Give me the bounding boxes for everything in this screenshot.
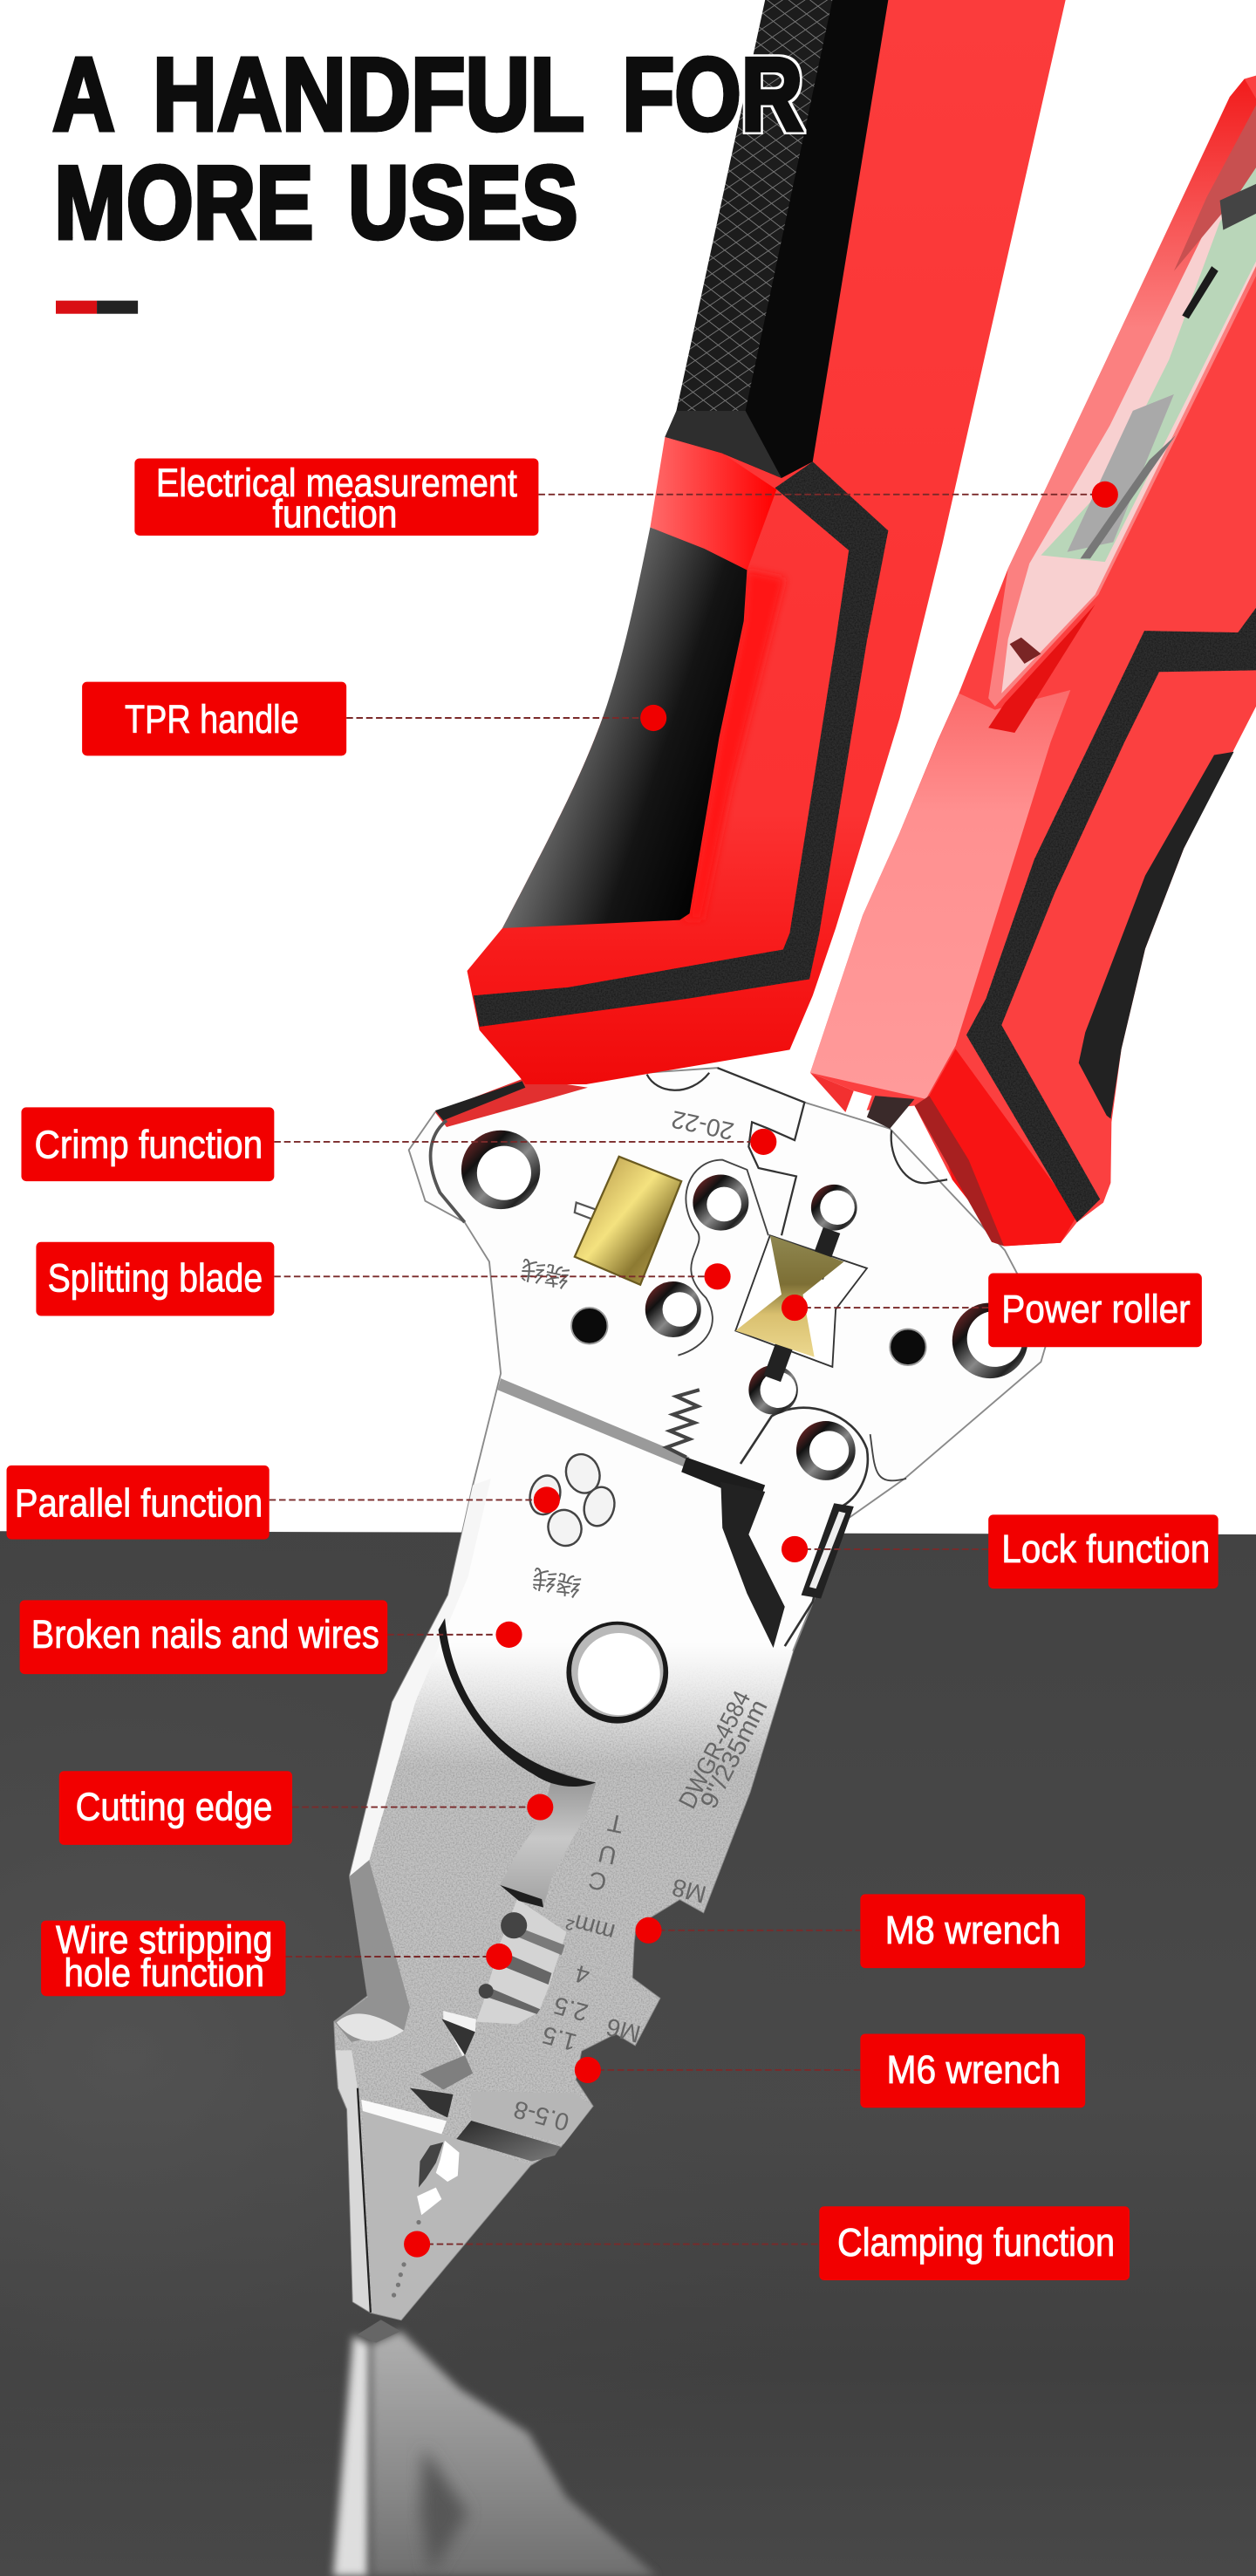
bottom end cap red (810, 1073, 854, 1112)
callout: wire stripping hole function: Wire stripping (56, 1917, 272, 1962)
four parallel holes (526, 1450, 618, 1550)
ring lever pivot (796, 1421, 856, 1480)
outer side arc of head (431, 1120, 465, 1222)
title accent bar (56, 301, 138, 314)
engraved model text: T (605, 1808, 625, 1839)
ring pivot lower centre (645, 1281, 701, 1337)
serration dark (419, 2142, 443, 2188)
callout: power roller (782, 1274, 1202, 1347)
dark scissor shadow (720, 1482, 785, 1648)
dark red shaded edge (914, 1096, 1004, 1246)
pure-red strip beside grip (679, 571, 785, 920)
engraved model text: DWGR-4584 (672, 1686, 755, 1813)
callout: clamping function: Clamping function (837, 2220, 1115, 2265)
reflection of the plier tip on the floor (333, 2320, 657, 2576)
dark stripe (474, 461, 888, 1027)
blade grain texture (335, 1680, 782, 2315)
callout: splitting blade (36, 1242, 731, 1316)
callout: cutting edge (59, 1771, 553, 1845)
ring bottom roller pin (748, 1365, 798, 1415)
callout: electrical measurement function (134, 458, 1118, 536)
red lip under window (988, 605, 1096, 733)
side facet (334, 1861, 410, 2042)
black crescent around large pivot (439, 1618, 596, 1787)
window screw (1010, 638, 1041, 664)
engraved model text: 0.5-8 (510, 2095, 572, 2137)
window glass (1001, 138, 1256, 694)
callout: crimp function: Crimp function (35, 1123, 263, 1167)
plate over jaw (471, 2091, 593, 2144)
ring pivot upper centre (693, 1175, 748, 1231)
wire stripping slots (479, 1912, 565, 2014)
jaw plane (363, 2109, 530, 2320)
lock slider (802, 1503, 854, 1598)
engraved model text: 9"/235mm (694, 1695, 773, 1813)
wire channel (476, 1899, 566, 2024)
callout: lock function: Lock function (1001, 1527, 1210, 1571)
callout: broken nails and wires: Broken nails and wires (31, 1612, 379, 1657)
cutting edge notch (500, 1770, 596, 1907)
engraved model text: C (586, 1866, 609, 1897)
title (52, 38, 802, 261)
screw left (571, 1308, 607, 1344)
engraved model text (510, 1105, 773, 2137)
engraved model text: mm² (563, 1908, 618, 1947)
engraved model text: 4 (572, 1959, 592, 1990)
engraved model text: 20-22 (669, 1105, 736, 1146)
callout: lock function (782, 1514, 1218, 1589)
callout: clamping function (404, 2206, 1130, 2280)
white side strip of jaw (336, 2050, 371, 2313)
red body (810, 76, 1256, 1246)
shoulder highlight (337, 2013, 404, 2041)
engraved model text: U (596, 1840, 619, 1870)
steel rod (497, 1378, 690, 1467)
callout: electrical measurement function: function (272, 492, 398, 536)
window frame (988, 79, 1256, 707)
right handle (810, 76, 1256, 1246)
circuit board (1041, 167, 1256, 562)
dark upper arm line (435, 1081, 525, 1120)
red band (650, 437, 776, 571)
engraved model text: M6 (604, 2012, 644, 2049)
jaw dark seam (358, 2088, 371, 2313)
brass power roller (735, 1227, 867, 1382)
big centre hole (566, 1622, 668, 1724)
window top shading (1174, 106, 1256, 271)
engraved model text: M8 (669, 1873, 709, 1909)
pivot arm outline (741, 1408, 868, 1646)
background: white upper wall (0, 0, 1256, 1534)
mount ring right (952, 1302, 1027, 1378)
spring (666, 1390, 700, 1457)
callout: TPR handle (82, 682, 666, 755)
lower grey blade body (334, 1618, 793, 2320)
dark stripe (966, 608, 1256, 1222)
jaw dots (392, 2220, 421, 2298)
callout: wire stripping hole function: hole function (64, 1951, 264, 1995)
red body (468, 0, 1066, 1084)
diamond mesh texture (677, 0, 832, 411)
callout: parallel function: Parallel function (15, 1480, 263, 1525)
callout: M8 wrench (635, 1894, 1085, 1968)
title: A (52, 38, 115, 153)
left handle (468, 0, 1066, 1084)
plain black section (665, 0, 888, 478)
crimp arc notches (647, 1073, 709, 1090)
callout: TPR handle: TPR handle (125, 697, 299, 741)
callout: wire stripping hole function (41, 1917, 512, 1996)
dark link bar (681, 1457, 765, 1503)
star notch (443, 2011, 476, 2057)
brass crimp cylinder (575, 1157, 681, 1285)
bottom chrome (867, 1096, 914, 1129)
ring top roller pin (811, 1185, 857, 1231)
mount ring top-left (461, 1131, 540, 1209)
screw right (890, 1329, 926, 1365)
callout: broken nails and wires (20, 1600, 522, 1674)
callout: splitting blade: Splitting blade (48, 1255, 263, 1300)
grey transition (665, 411, 782, 478)
callout: crimp function (21, 1107, 776, 1181)
left white bevel (350, 1479, 491, 1876)
title: MORE (54, 146, 314, 261)
background: dark floor (0, 1531, 1256, 2576)
red-tinted upper arm under the handle (435, 1077, 588, 1127)
engraved model text: 绕线 (518, 1254, 572, 1292)
callout: electrical measurement function: Electrical measurement (156, 461, 517, 505)
bright lower side (929, 1049, 1077, 1246)
head body (334, 1068, 1049, 2320)
black soft grip (502, 528, 747, 928)
engraved model text: 绕线 (529, 1563, 584, 1602)
engraved model text: 1.5 (539, 2021, 579, 2057)
jaw highlight (361, 2100, 447, 2134)
title: FOR (622, 38, 802, 153)
black outer grip (1079, 752, 1234, 1119)
callout: M8 wrench: M8 wrench (885, 1908, 1061, 1952)
pink top face (810, 690, 1070, 1099)
title: HANDFUL (153, 38, 584, 153)
callout: M6 wrench (575, 2034, 1085, 2108)
callout: power roller: Power roller (1001, 1287, 1191, 1331)
engraved model text: 2.5 (550, 1992, 590, 2027)
title: USES (348, 146, 578, 261)
serration white teeth (436, 2141, 459, 2182)
callout: cutting edge: Cutting edge (76, 1785, 272, 1829)
metal plier head (334, 1068, 1049, 2320)
bottom white chip (845, 1091, 872, 1119)
dark band above jaw (456, 2121, 561, 2162)
pit (410, 2088, 454, 2118)
callout: parallel function (7, 1466, 560, 1540)
callout: M6 wrench: M6 wrench (886, 2047, 1061, 2092)
